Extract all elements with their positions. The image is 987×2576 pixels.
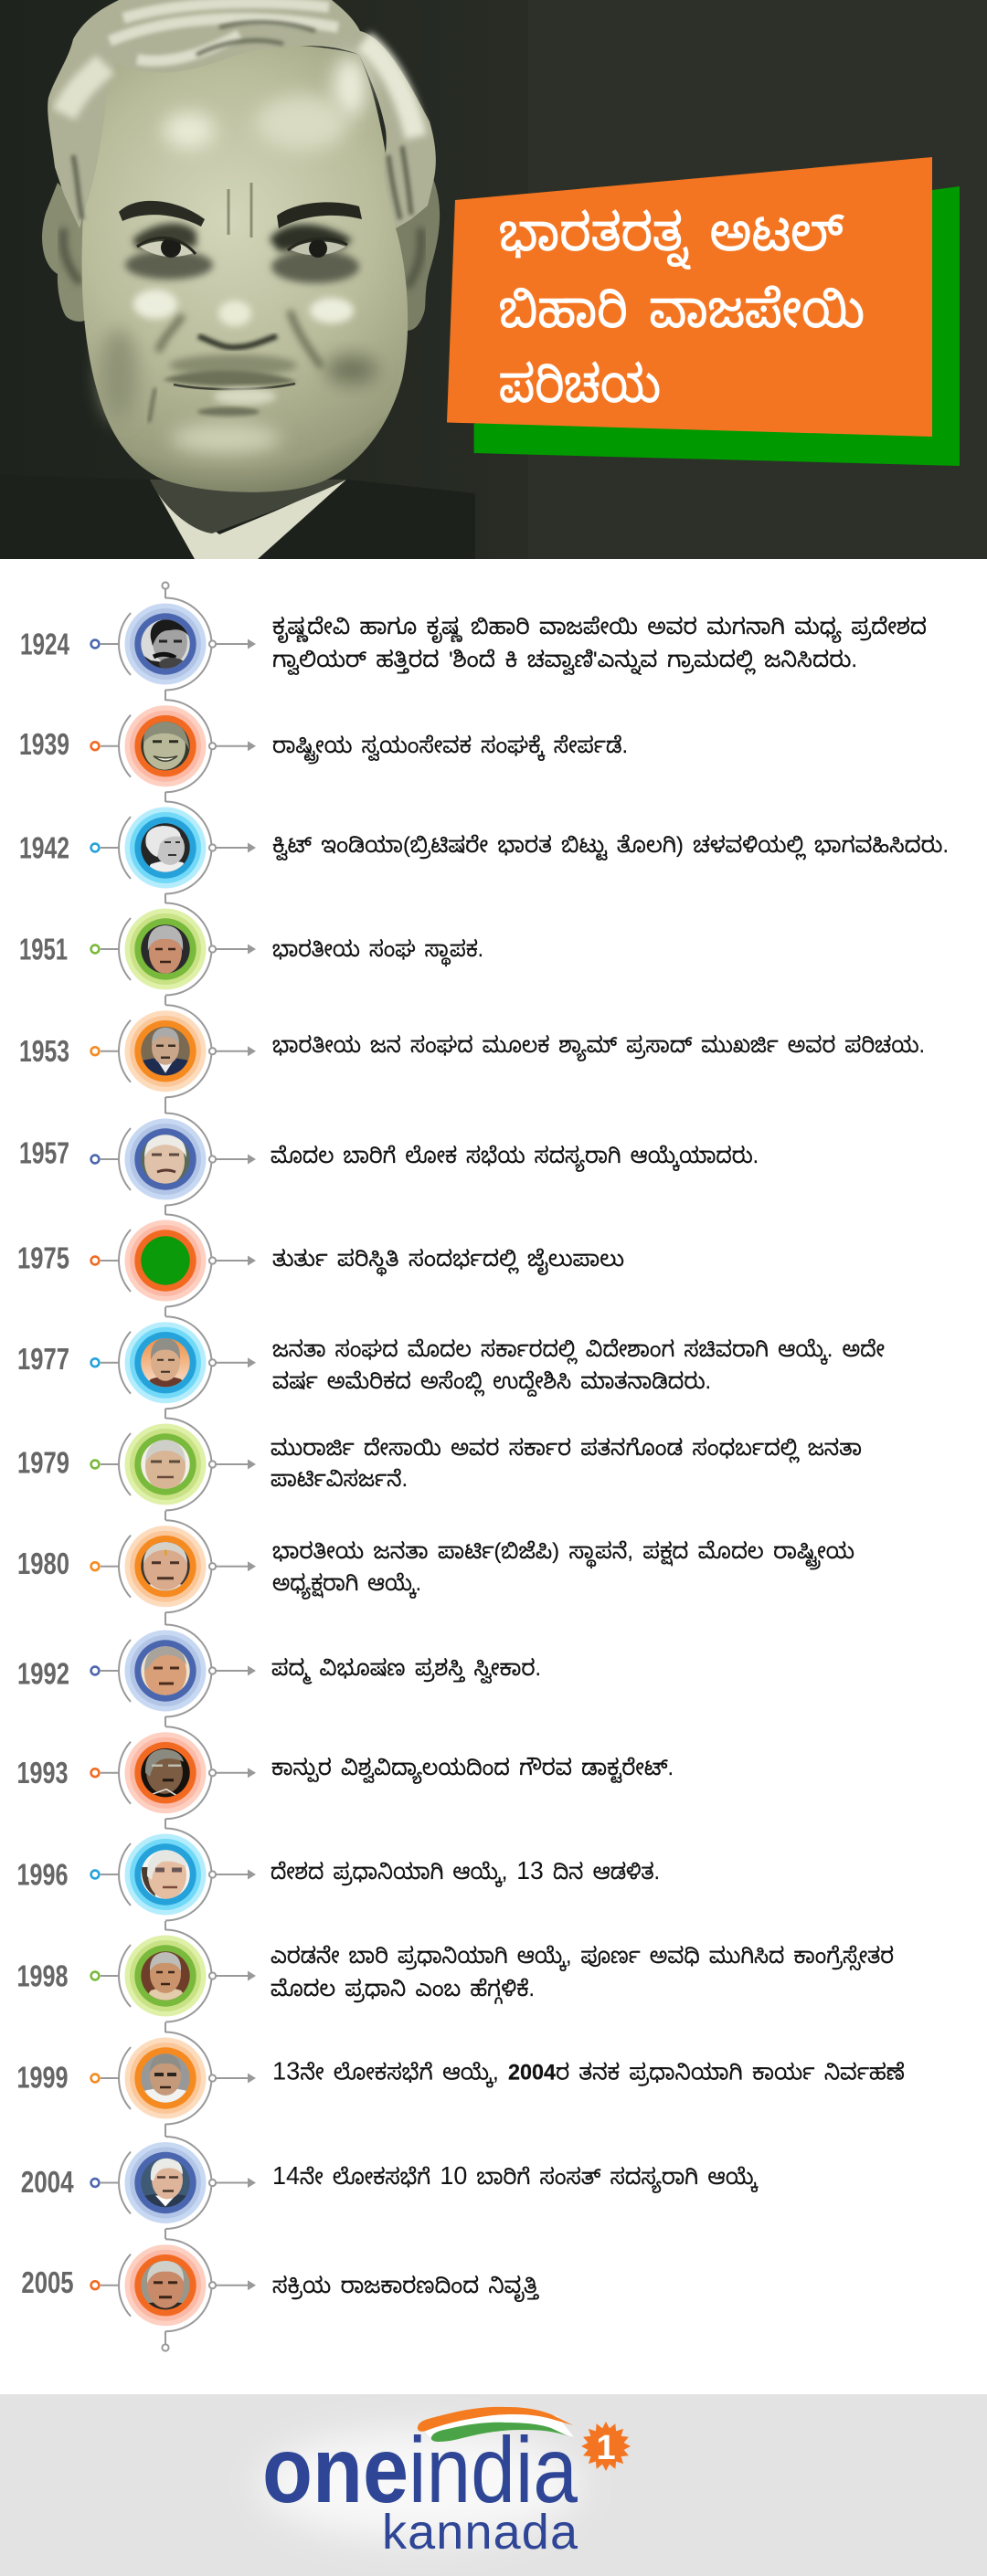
portrait photo bbox=[0, 0, 475, 559]
row: 1953: 1953 bbox=[19, 1034, 69, 1068]
text: 1999: 13ನೇ ಲೋಕಸಭೆಗೆ ಆಯ್ಕೆ, 2004ರ ತನಕ ಪ್ರಧಾನಿಯಾಗಿ ಕಾರ್ಯ ನಿರ್ವಹಣೆ bbox=[272, 2057, 905, 2088]
text: 1996: ದೇಶದ ಪ್ರಧಾನಿಯಾಗಿ ಆಯ್ಕೆ, 13 ದಿನ ಆಡಳಿತ. bbox=[271, 1856, 660, 1887]
text: 1998: ಎರಡನೇ ಬಾರಿ ಪ್ರಧಾನಿಯಾಗಿ ಆಯ್ಕೆ, ಪೂರ್ಣ ಅವಧಿ ಮುಗಿಸಿದ ಕಾಂಗ್ರೆಸ್ಸೇತರ bbox=[271, 1944, 894, 1971]
banner: green backing bbox=[474, 186, 960, 466]
title: ಭಾರತರತ್ನ ಅಟಲ್ bbox=[499, 204, 844, 269]
footer panel bbox=[0, 2394, 987, 2576]
row: 1951 bbox=[19, 903, 256, 996]
row: 1975 bbox=[17, 1215, 256, 1306]
row: 1957: 1957 bbox=[19, 1136, 69, 1169]
row: 1996: 1996 bbox=[16, 1858, 68, 1891]
text: 1977: ವರ್ಷ ಅಮೆರಿಕದ ಅಸೆಂಬ್ಲಿ ಉದ್ದೇಶಿಸಿ ಮಾತನಾಡಿದರು. bbox=[272, 1369, 711, 1397]
title: ಪರಿಚಯ bbox=[499, 355, 661, 413]
text: 1975: ತುರ್ತು ಪರಿಸ್ಥಿತಿ ಸಂದರ್ಭದಲ್ಲಿ ಜೈಲುಪಾಲು bbox=[272, 1247, 624, 1276]
row: 1979: 1979 bbox=[17, 1445, 69, 1480]
timeline stem bottom bbox=[162, 2331, 169, 2351]
text: 2004: 14ನೇ ಲೋಕಸಭೆಗೆ 10 ಬಾರಿಗೆ ಸಂಸತ್ ಸದಸ್ಯರಾಗಿ ಆಯ್ಕೆ bbox=[272, 2161, 759, 2193]
text: 1998: ಮೊದಲ ಪ್ರಧಾನಿ ಎಂಬ ಹೆಗ್ಗಳಿಕೆ. bbox=[271, 1977, 535, 2004]
text: 1979: ಮುರಾರ್ಜಿ ದೇಸಾಯಿ ಅವರ ಸರ್ಕಾರ ಪತನಗೊಂಡ ಸಂಧರ್ಬದಲ್ಲಿ ಜನತಾ bbox=[271, 1436, 862, 1463]
row: 1924 bbox=[20, 597, 256, 691]
row: 1980 bbox=[17, 1520, 256, 1612]
row: 1939: 1939 bbox=[19, 727, 69, 761]
row: 2005 bbox=[21, 2239, 256, 2331]
row: 1953 bbox=[19, 1005, 256, 1097]
text: 1924 bbox=[272, 615, 927, 675]
hero panel bbox=[0, 0, 987, 559]
row: 1980: 1980 bbox=[17, 1547, 69, 1580]
row: 1998 bbox=[16, 1929, 256, 2022]
row: 1998: 1998 bbox=[16, 1958, 68, 1993]
text: 1977 bbox=[272, 1337, 885, 1397]
row: 1999: 1999 bbox=[16, 2061, 68, 2094]
timeline stem top bbox=[162, 582, 169, 598]
row: 1992 bbox=[17, 1624, 256, 1717]
text: 1939: ರಾಷ್ಟ್ರೀಯ ಸ್ವಯಂಸೇವಕ ಸಂಘಕ್ಕೆ ಸೇರ್ಪಡೆ. bbox=[272, 734, 628, 765]
text: 1957: ಮೊದಲ ಬಾರಿಗೆ ಲೋಕ ಸಭೆಯ ಸದಸ್ಯರಾಗಿ ಆಯ್ಕೆಯಾದರು. bbox=[271, 1144, 759, 1172]
text: 1979 bbox=[271, 1436, 862, 1492]
row: 1942 bbox=[19, 802, 256, 893]
row: 1957 bbox=[19, 1113, 256, 1206]
logo: flag swoosh orange bbox=[418, 2407, 573, 2432]
row: 1975: 1975 bbox=[17, 1240, 69, 1275]
text: 1942: ಕ್ವಿಟ್ ಇಂಡಿಯಾ(ಬ್ರಿಟಿಷರೇ ಭಾರತ ಬಿಟ್ಟು ತೊಲಗಿ) ಚಳವಳಿಯಲ್ಲಿ ಭಾಗವಹಿಸಿದರು. bbox=[272, 833, 949, 860]
row: 2004: 2004 bbox=[21, 2165, 74, 2199]
logo: kannada wordmark: kannada bbox=[382, 2505, 578, 2560]
logo: flag swoosh green bbox=[431, 2423, 568, 2442]
title bbox=[499, 204, 865, 413]
text: 1951: ಭಾರತೀಯ ಸಂಘ ಸ್ಥಾಪಕ. bbox=[272, 937, 483, 966]
text: 1953: ಭಾರತೀಯ ಜನ ಸಂಘದ ಮೂಲಕ ಶ್ಯಾಮ್ ಪ್ರಸಾದ್ ಮುಖರ್ಜಿ ಅವರ ಪರಿಚಯ. bbox=[272, 1033, 925, 1061]
row: 1993 bbox=[16, 1726, 256, 1819]
banner: orange panel bbox=[447, 157, 932, 437]
row: 1977 bbox=[17, 1316, 256, 1409]
text: 1998 bbox=[271, 1944, 894, 2004]
row: 2004 bbox=[21, 2137, 256, 2229]
text: 1993: ಕಾನ್ಪುರ ವಿಶ್ವವಿದ್ಯಾಲಯದಿಂದ ಗೌರವ ಡಾಕ್ಟರೇಟ್. bbox=[271, 1756, 674, 1784]
text: 1980: ಭಾರತೀಯ ಜನತಾ ಪಾರ್ಟಿ(ಬಿಜೆಪಿ) ಸ್ಥಾಪನೆ, ಪಕ್ಷದ ಮೊದಲ ರಾಷ್ಟ್ರೀಯ bbox=[272, 1539, 854, 1570]
text: 1980: ಅಧ್ಯಕ್ಷರಾಗಿ ಆಯ್ಕೆ. bbox=[272, 1571, 421, 1599]
text: 1979: ಪಾರ್ಟಿವಿಸರ್ಜನೆ. bbox=[271, 1467, 408, 1492]
text: 1992: ಪದ್ಮ ವಿಭೂಷಣ ಪ್ರಶಸ್ತಿ ಸ್ವೀಕಾರ. bbox=[271, 1656, 541, 1684]
title: ಬಿಹಾರಿ ವಾಜಪೇಯಿ bbox=[499, 280, 865, 338]
text: 2005: ಸಕ್ರಿಯ ರಾಜಕಾರಣದಿಂದ ನಿವೃತ್ತಿ bbox=[272, 2274, 539, 2302]
text: 1924: ಕೃಷ್ಣದೇವಿ ಹಾಗೂ ಕೃಷ್ಣ ಬಿಹಾರಿ ವಾಜಪೇಯಿ ಅವರ ಮಗನಾಗಿ ಮಧ್ಯ ಪ್ರದೇಶದ bbox=[272, 615, 927, 643]
logo: number one badge: 1 bbox=[596, 2429, 616, 2467]
logo: oneindia wordmark: one bbox=[262, 2418, 409, 2522]
row: 1979 bbox=[17, 1418, 256, 1511]
logo: number one badge bbox=[581, 2422, 631, 2471]
row: 1942: 1942 bbox=[19, 831, 69, 864]
row: 1992: 1992 bbox=[17, 1657, 69, 1690]
row: 1993: 1993 bbox=[16, 1756, 68, 1789]
logo: white swoosh band bbox=[425, 2413, 574, 2441]
row: 1951: 1951 bbox=[19, 932, 68, 966]
row: 1924: 1924 bbox=[20, 627, 69, 661]
text: 1924: ಗ್ವಾಲಿಯರ್ ಹತ್ತಿರದ 'ಶಿಂದೆ ಕಿ ಚವ್ವಾಣಿ'ಎನ್ನುವ ಗ್ರಾಮದಲ್ಲಿ ಜನಿಸಿದರು. bbox=[272, 648, 857, 675]
row: 1939 bbox=[19, 700, 256, 792]
row: 1999 bbox=[16, 2032, 256, 2125]
row: 1996 bbox=[16, 1829, 256, 1920]
logo: oneindia wordmark bbox=[262, 2418, 578, 2522]
row: 2005: 2005 bbox=[21, 2265, 74, 2299]
text: 1977: ಜನತಾ ಸಂಘದ ಮೊದಲ ಸರ್ಕಾರದಲ್ಲಿ ವಿದೇಶಾಂಗ ಸಚಿವರಾಗಿ ಆಯ್ಕೆ. ಅದೇ bbox=[272, 1337, 885, 1365]
row: 1977: 1977 bbox=[17, 1342, 69, 1376]
timeline connectors bbox=[164, 690, 166, 2239]
logo: oneindia wordmark: india bbox=[409, 2418, 578, 2522]
text: 1980 bbox=[272, 1539, 854, 1599]
